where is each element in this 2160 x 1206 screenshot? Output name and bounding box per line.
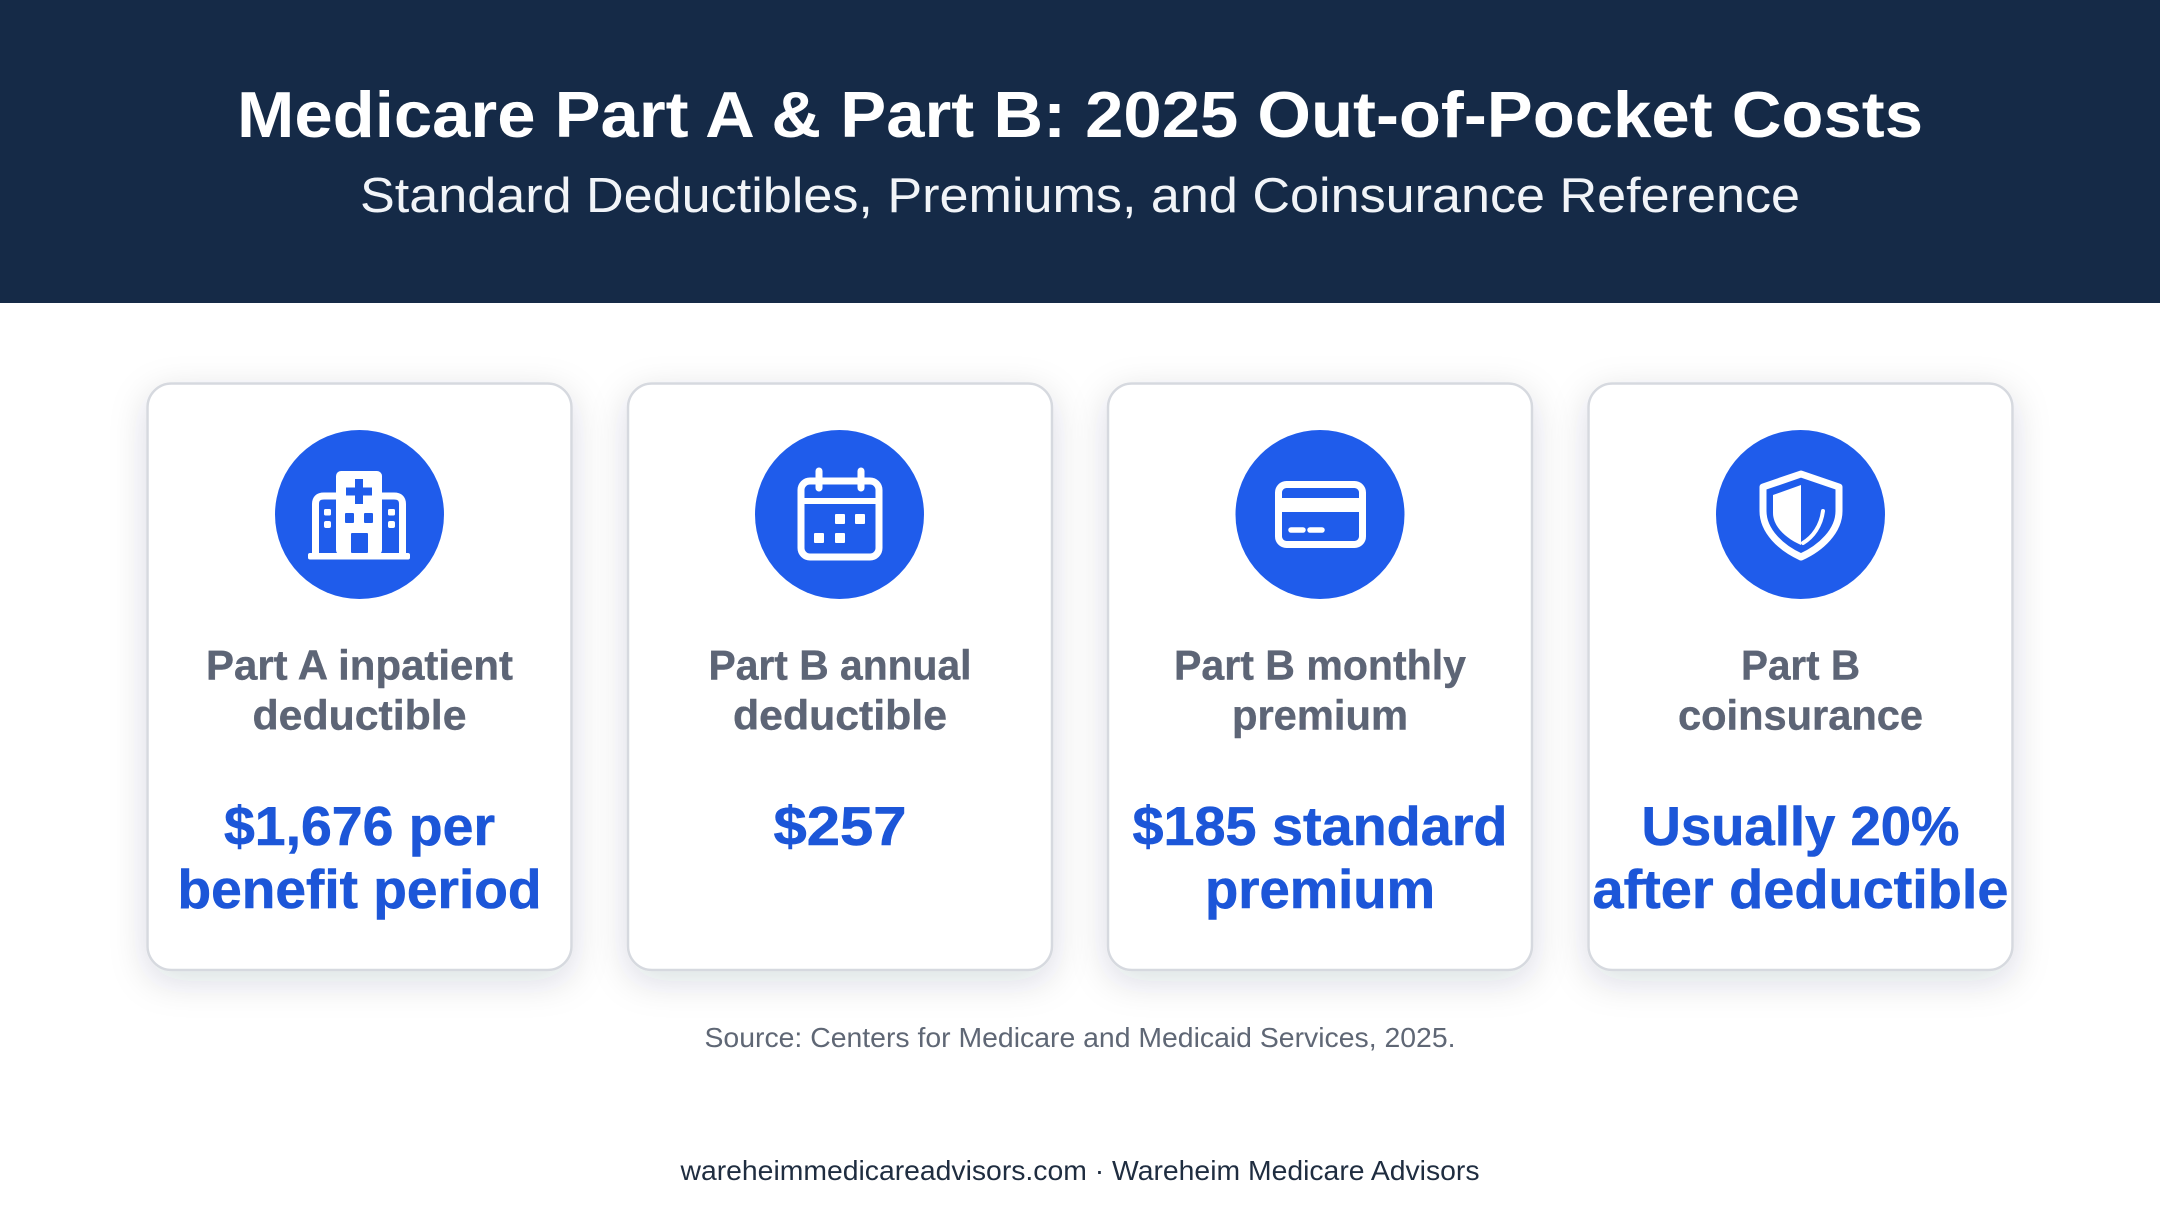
icon: credit card: [1236, 430, 1404, 599]
value: [1132, 795, 1508, 920]
value: $185 standard: [1132, 795, 1508, 857]
value: $1,676 per: [224, 795, 495, 857]
panel: Part B monthly premium: [1108, 384, 1532, 970]
icon: hospital: [275, 430, 444, 599]
label: [708, 642, 972, 738]
title: Medicare Part A & Part B: 2025 Out-of-Pocket Costs: [237, 78, 1923, 151]
value: [178, 795, 542, 920]
panel: Part B coinsurance: [1588, 384, 2012, 970]
label: [1678, 642, 1923, 738]
label: Part B monthly: [1174, 642, 1467, 688]
value: [1592, 795, 2008, 920]
header banner: [0, 0, 2160, 303]
label: Part B: [1741, 642, 1860, 688]
value: premium: [1205, 858, 1435, 920]
label: premium: [1232, 692, 1408, 738]
subtitle: Standard Deductibles, Premiums, and Coinsurance Reference: [360, 169, 1800, 223]
icon: calendar: [755, 430, 924, 599]
panel: Part B annual deductible: [628, 384, 1052, 970]
value: Usually 20%: [1642, 795, 1960, 857]
label: deductible: [252, 692, 466, 738]
source note: Source: Centers for Medicare and Medicaid Services, 2025.: [704, 1022, 1456, 1053]
label: [206, 642, 513, 738]
panel: Part A inpatient deductible: [148, 384, 572, 970]
value: benefit period: [178, 858, 542, 920]
label: Part A inpatient: [206, 642, 513, 688]
value: after deductible: [1592, 858, 2008, 920]
value: $257: [774, 795, 906, 857]
label: Part B annual: [708, 642, 972, 688]
label: [1174, 642, 1467, 738]
label: coinsurance: [1678, 692, 1923, 738]
label: deductible: [733, 692, 947, 738]
footer: wareheimmedicareadvisors.com · Wareheim Medicare Advisors: [679, 1155, 1480, 1186]
icon: shield: [1716, 430, 1885, 599]
